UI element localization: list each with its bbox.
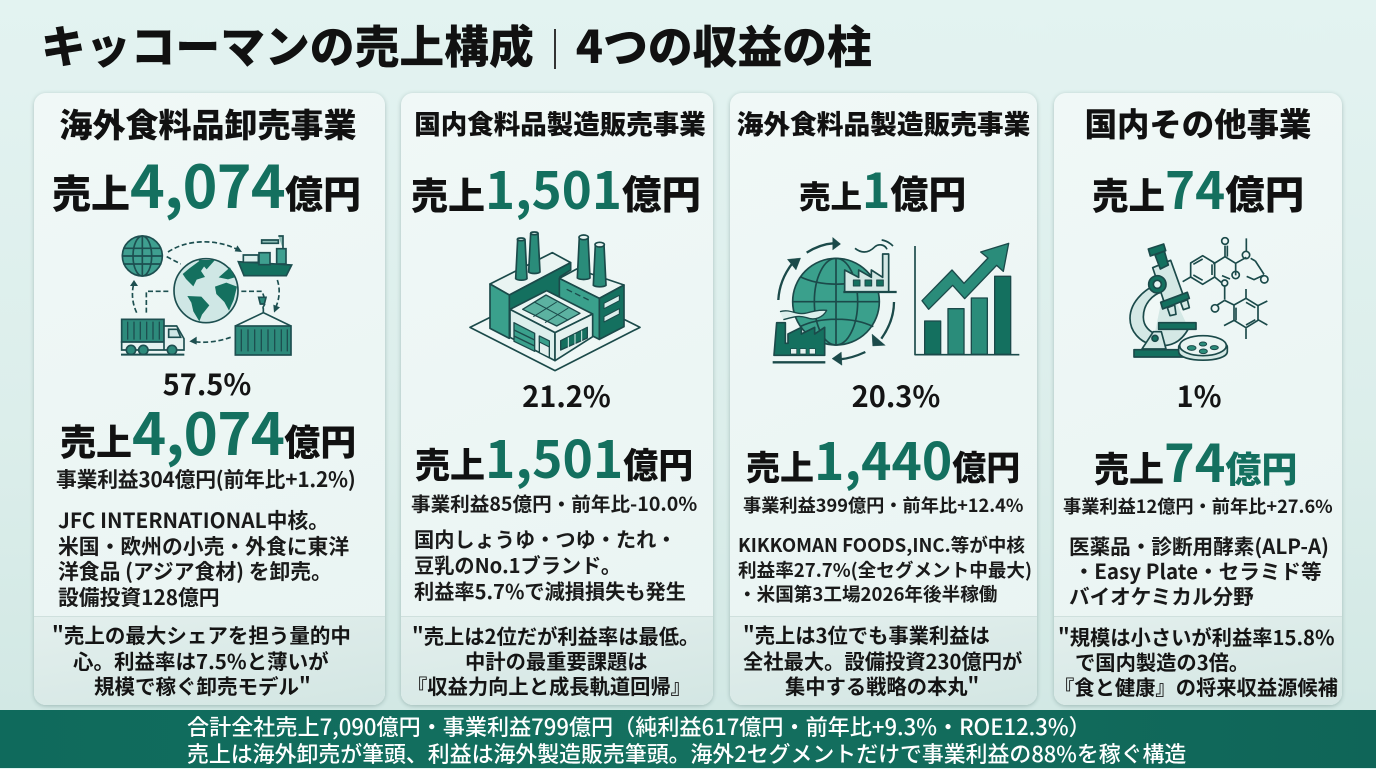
quote panel [730, 616, 1037, 706]
description [738, 531, 1032, 607]
quote [743, 619, 1022, 700]
description: ・米国第3工場2026年後半稼働 [738, 580, 997, 607]
quote: "売上は2位だが利益率は最低。 [412, 620, 699, 650]
share percentage: 21.2% [522, 374, 611, 416]
description: 洋食品 (アジア食材) を卸売。 [58, 555, 332, 585]
panel: overseas wholesale [34, 93, 385, 705]
panel: domestic manufacturing [401, 93, 713, 705]
quote: "売上は3位でも事業利益は [743, 619, 990, 649]
operating profit: 事業利益85億円・前年比-10.0% [411, 488, 697, 517]
description: ・Easy Plate・セラミド等 [1074, 555, 1322, 585]
icon: microscope and molecule [1129, 236, 1269, 361]
icon: factory [469, 231, 641, 372]
panel: domestic other [1054, 93, 1342, 705]
operating profit: 事業利益12億円・前年比+27.6% [1063, 493, 1333, 519]
sales figure: 売上1,501億円 [411, 150, 701, 224]
quote: "規模は小さいが利益率15.8% [1058, 621, 1335, 651]
sales figure repeat: 売上1,440億円 [746, 420, 1020, 495]
sales figure: 売上4,074億円 [52, 140, 361, 225]
description: 米国・欧州の小売・外食に東洋 [58, 530, 349, 560]
share percentage: 20.3% [852, 374, 940, 416]
description [1069, 530, 1329, 610]
description: バイオケミカル分野 [1069, 580, 1254, 610]
quote panel [1054, 616, 1342, 706]
quote panel [401, 616, 713, 706]
description: 利益率27.7%(全セグメント中最大) [738, 556, 1032, 582]
share percentage: 57.5% [163, 362, 251, 404]
description: 豆乳のNo.1ブランド。 [414, 550, 621, 579]
title: キッコーマンの売上構成 4つの収益の柱 [41, 11, 872, 76]
heading: 海外食料品卸売事業 [60, 99, 356, 147]
sales figure repeat: 売上1,501億円 [415, 418, 693, 493]
sales figure: 売上1億円 [799, 152, 966, 222]
footer banner [0, 710, 1376, 768]
description: 設備投資128億円 [58, 580, 220, 610]
quote panel [34, 616, 385, 706]
operating profit: 事業利益304億円(前年比+1.2%) [56, 463, 356, 493]
description: JFC INTERNATIONAL中核。 [58, 504, 329, 534]
description: 医薬品・診断用酵素(ALP-A) [1069, 530, 1329, 560]
quote: 規模で稼ぐ卸売モデル" [94, 670, 311, 700]
panel: overseas manufacturing [730, 93, 1037, 705]
sales figure repeat: 売上4,074億円 [60, 388, 356, 472]
sales figure: 売上74億円 [1092, 150, 1304, 224]
quote: 全社最大。設備投資230億円が [743, 644, 1022, 674]
description [58, 504, 349, 610]
quote: 心。利益率は7.5%と薄いが [73, 644, 329, 674]
heading: 国内食料品製造販売事業 [414, 103, 706, 142]
summary line: 合計全社売上7,090億円・事業利益799億円（純利益617億円・前年比+9.3%・ROE12.3%） [187, 710, 1091, 742]
quote: "売上の最大シェアを担う量的中 [52, 619, 351, 649]
icon: global manufacturing and growth [772, 237, 1020, 366]
quote: 『収益力向上と成長軌道回帰』 [407, 670, 691, 700]
heading: 国内その他事業 [1085, 99, 1311, 146]
quote [1054, 621, 1338, 701]
quote [407, 620, 699, 700]
description: KIKKOMAN FOODS,INC.等が中核 [738, 531, 1025, 558]
description [414, 524, 686, 605]
quote: 中計の最重要課題は [465, 645, 648, 675]
quote: 『食と健康』の将来収益源候補 [1054, 671, 1338, 701]
quote: 集中する戦略の本丸" [785, 670, 979, 700]
takeaway line: 売上は海外卸売が筆頭、利益は海外製造販売筆頭。海外2セグメントだけで事業利益の88%を稼ぐ構造 [187, 738, 1186, 769]
operating profit: 事業利益399億円・前年比+12.4% [743, 492, 1023, 518]
description: 国内しょうゆ・つゆ・たれ・ [414, 524, 676, 553]
quote: で国内製造の3倍。 [1075, 646, 1249, 676]
sales figure repeat: 売上74億円 [1094, 422, 1297, 497]
quote [52, 619, 351, 700]
share percentage: 1% [1176, 374, 1222, 416]
icon: global distribution [120, 235, 293, 356]
description: 利益率5.7%で減損損失も発生 [414, 576, 686, 605]
heading: 海外食料品製造販売事業 [737, 103, 1030, 142]
